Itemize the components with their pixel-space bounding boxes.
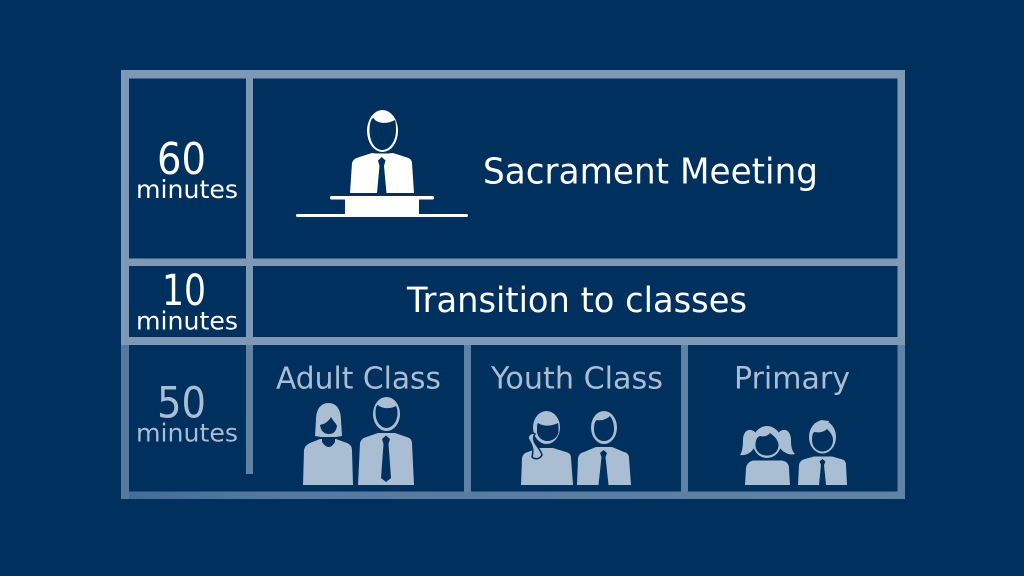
icon: adult woman bbox=[303, 403, 353, 485]
heading: Youth Class: Youth Class bbox=[490, 362, 663, 396]
icon: primary girl and boy bbox=[740, 420, 847, 485]
label: 60 minutes: 60 bbox=[157, 134, 206, 185]
icon: youth girl and boy bbox=[521, 411, 631, 485]
icon: youth boy bbox=[577, 411, 631, 485]
label: 50 minutes: minutes bbox=[136, 418, 238, 448]
label: 60 minutes bbox=[136, 134, 238, 204]
label: 10 minutes bbox=[136, 266, 238, 336]
label: 60 minutes: minutes bbox=[136, 175, 238, 204]
icon: adult woman and man bbox=[303, 397, 414, 485]
label: 50 minutes: 50 bbox=[157, 378, 206, 428]
icon: youth girl bbox=[521, 411, 573, 485]
label: 10 minutes: minutes bbox=[136, 306, 238, 336]
heading: Sacrament Meeting: Sacrament Meeting bbox=[483, 152, 818, 192]
icon: adult man bbox=[358, 397, 414, 485]
label: 10 minutes: 10 bbox=[162, 266, 206, 316]
heading: Primary: Primary bbox=[734, 362, 850, 396]
icon: primary girl bbox=[740, 426, 795, 485]
heading: Adult Class: Adult Class bbox=[276, 362, 441, 396]
heading: Transition to classes: Transition to classes bbox=[406, 281, 747, 321]
label: 50 minutes bbox=[136, 378, 238, 448]
icon: speaker at podium bbox=[296, 110, 468, 217]
icon: primary boy bbox=[798, 420, 847, 485]
